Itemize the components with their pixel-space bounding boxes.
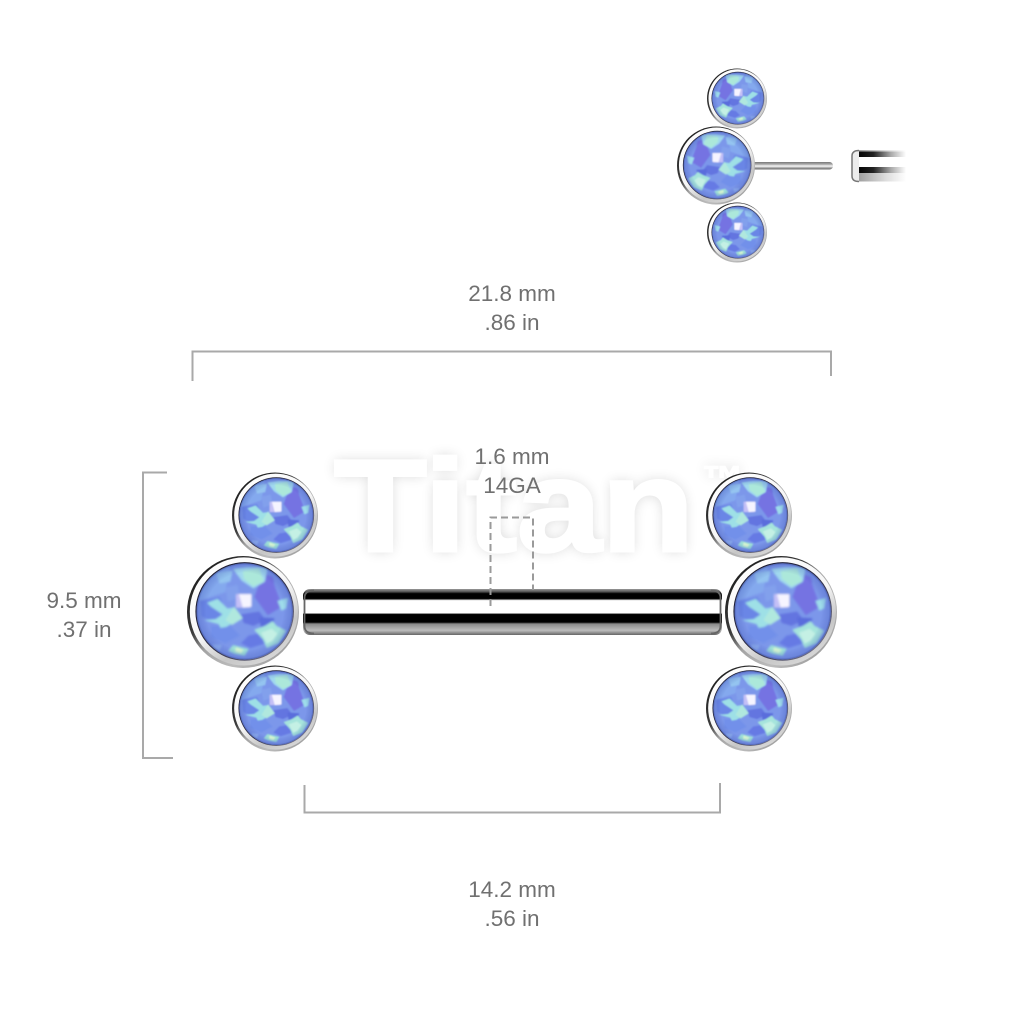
watermark: Titan: Titan <box>334 432 694 579</box>
watermark: Titan: ™ <box>702 458 743 499</box>
width label: 21.8 mm <box>468 281 556 335</box>
thumbnail barbell end <box>852 150 906 182</box>
thumbnail pin <box>752 162 833 170</box>
gauge label: 1.6 mm <box>474 444 550 498</box>
left opal bottom <box>232 666 318 752</box>
dashed gauge guide <box>490 518 533 606</box>
thumbnail opal center <box>677 126 755 204</box>
top thumbnail: side view of stud <box>677 68 906 262</box>
right opal bottom <box>706 666 792 752</box>
height label: 9.5 mm: 9.5 mm <box>46 588 122 613</box>
height label: 9.5 mm <box>46 588 122 642</box>
barbell <box>187 472 837 752</box>
bracket: height <box>143 472 173 758</box>
bar end caps <box>304 590 720 634</box>
height label: 9.5 mm: .37 in <box>56 617 112 642</box>
thumbnail opal bottom <box>707 202 767 262</box>
right opal center <box>725 556 837 668</box>
thumbnail opal top <box>707 68 767 128</box>
width label: 21.8 mm: 21.8 mm <box>468 281 556 306</box>
bracket: bar length <box>304 783 720 812</box>
bar shaft <box>303 589 722 635</box>
left opal top <box>232 472 318 558</box>
gauge label: 1.6 mm: 1.6 mm <box>474 444 550 469</box>
length label: 14.2 mm: 14.2 mm <box>468 877 556 902</box>
length label: 14.2 mm: .56 in <box>484 906 540 931</box>
right opal top <box>706 472 792 558</box>
left opal center <box>187 556 299 668</box>
gauge label: 1.6 mm: 14GA <box>483 473 541 498</box>
diagram <box>48 68 904 926</box>
length label: 14.2 mm <box>468 877 556 931</box>
bracket: total width <box>192 352 831 381</box>
width label: 21.8 mm: .86 in <box>484 310 540 335</box>
